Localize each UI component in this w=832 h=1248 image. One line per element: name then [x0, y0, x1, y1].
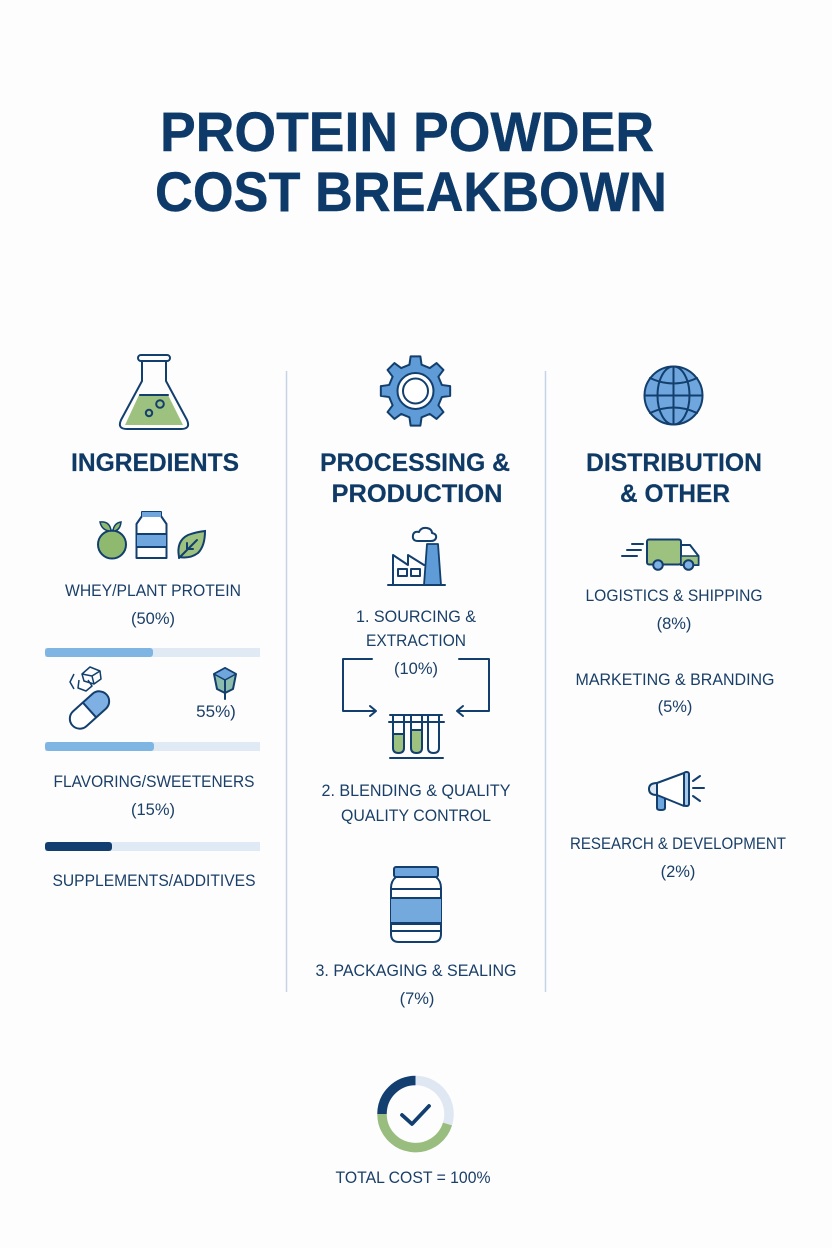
icon: factory — [388, 528, 445, 585]
label: packaging and sealing: (7%) — [400, 990, 434, 1008]
label: research and development: RESEARCH & DEVELOPMENT — [570, 835, 786, 853]
arrow: right bracket — [457, 659, 489, 716]
label: logistics and shipping: LOGISTICS & SHIPPING — [586, 587, 762, 605]
label: sourcing and extraction: (10%) — [394, 660, 438, 678]
bar: second — [45, 742, 260, 751]
heading: processing and production: PRODUCTION — [332, 480, 502, 508]
label: flavoring/sweeteners — [54, 773, 254, 819]
bar: protein — [45, 648, 260, 657]
icon: megaphone — [649, 772, 704, 810]
label: blending and quality — [322, 782, 510, 825]
label: whey/plant protein: (50%) — [131, 610, 175, 628]
bar: flavoring — [45, 842, 260, 851]
panel: ingredients — [45, 355, 260, 890]
arrow: left bracket — [343, 659, 376, 716]
label: whey/plant protein: WHEY/PLANT PROTEIN — [65, 582, 241, 600]
icon: apple — [98, 522, 126, 558]
label: marketing and branding: MARKETING & BRANDING — [576, 671, 774, 689]
label: blending and quality: QUALITY CONTROL — [341, 807, 491, 825]
icon: capsule — [66, 687, 113, 733]
label: packaging and sealing — [316, 962, 516, 1008]
icon: globe — [644, 366, 702, 424]
label: 55%: 55%) — [196, 702, 236, 721]
label: research and development: (2%) — [661, 863, 695, 881]
panel: processing and production — [316, 356, 516, 1008]
panel: distribution and other — [570, 366, 786, 881]
title: PROTEIN POWDER — [160, 100, 654, 163]
heading: processing and production: PROCESSING & — [320, 449, 510, 477]
heading: processing and production — [320, 449, 510, 508]
label: sourcing and extraction — [356, 608, 476, 678]
heading: distribution and other: DISTRIBUTION — [586, 449, 762, 477]
icon: leaf — [178, 531, 205, 558]
heading: ingredients: INGREDIENTS — [71, 449, 239, 477]
icon: cube — [214, 668, 236, 699]
icon: sugar cubes — [70, 667, 101, 691]
label: flavoring/sweeteners: (15%) — [131, 801, 175, 819]
label: packaging and sealing: 3. PACKAGING & SEALING — [316, 962, 516, 980]
label: marketing and branding: (5%) — [658, 698, 692, 716]
icon: gear — [381, 356, 450, 426]
icon: flask — [120, 355, 188, 429]
title: COST BREAKBOWN — [155, 160, 667, 223]
title — [155, 100, 667, 223]
label: logistics and shipping — [586, 587, 762, 633]
label: sourcing and extraction: 1. SOURCING & — [356, 608, 476, 626]
icon: protein carton — [136, 512, 166, 558]
label: logistics and shipping: (8%) — [657, 615, 691, 633]
label: blending and quality: 2. BLENDING & QUALITY — [322, 782, 510, 800]
label: sourcing and extraction: EXTRACTION — [366, 632, 466, 650]
label: supplements/additives: SUPPLEMENTS/ADDITIVES — [52, 872, 256, 890]
label: marketing and branding — [576, 671, 774, 716]
heading: distribution and other: & OTHER — [620, 480, 730, 508]
icon: progress ring with check — [382, 1080, 449, 1148]
icon: jar — [391, 867, 441, 942]
heading: distribution and other — [586, 449, 762, 508]
icon: truck — [622, 540, 698, 570]
total cost: ring and caption — [336, 1080, 491, 1187]
label: flavoring/sweeteners: FLAVORING/SWEETENERS — [54, 773, 254, 791]
label: total cost: TOTAL COST = 100% — [336, 1169, 491, 1187]
label: research and development — [570, 835, 786, 881]
label: whey/plant protein — [65, 582, 241, 628]
icon: test tubes — [389, 715, 444, 758]
